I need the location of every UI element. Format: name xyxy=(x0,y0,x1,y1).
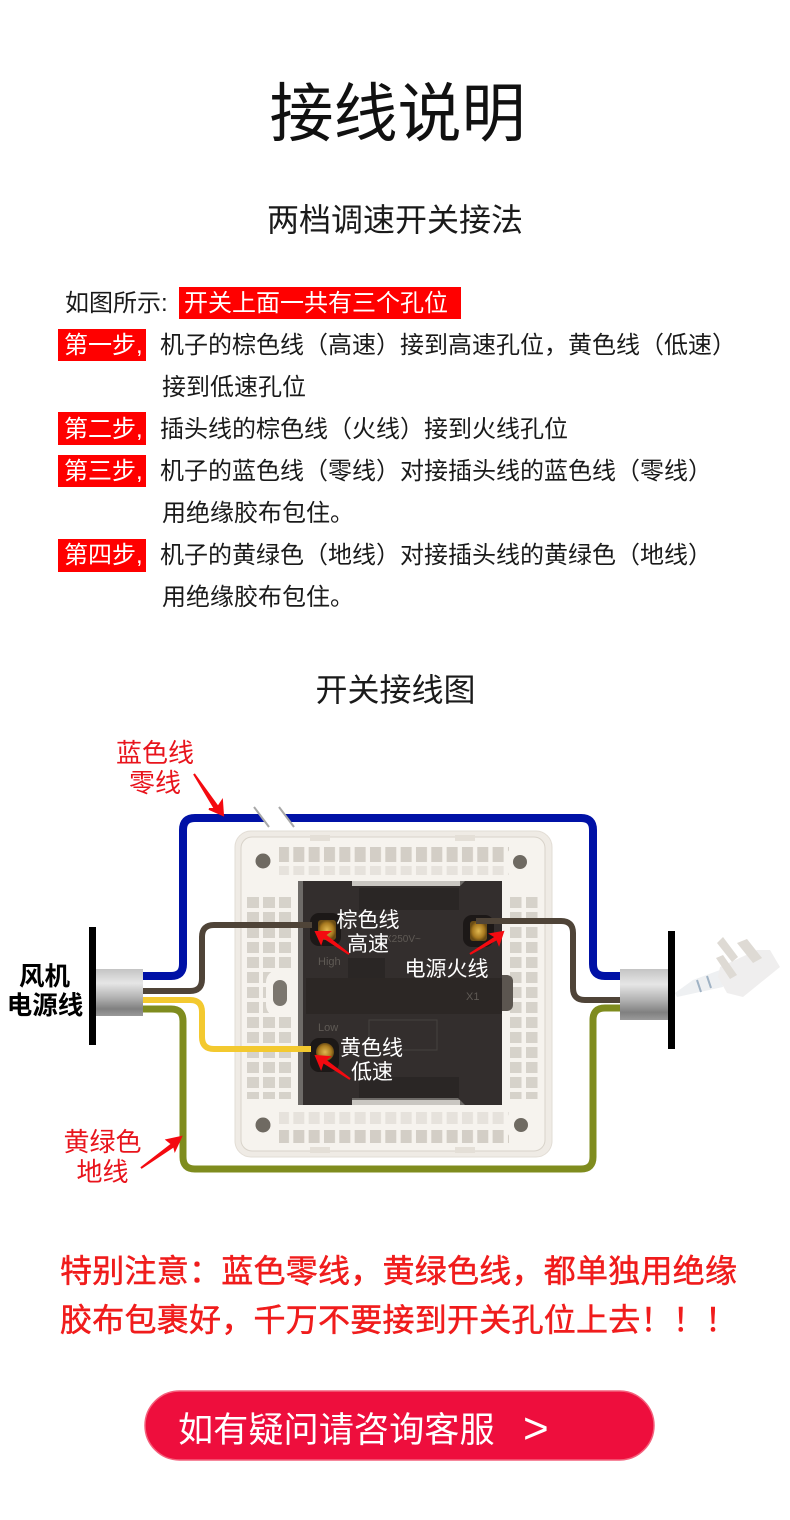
label: power live: 电源火线 xyxy=(404,958,488,981)
step 3: 用绝缘胶布包住。 xyxy=(162,500,354,527)
label: blue neutral: 零线 xyxy=(129,768,181,798)
wire: blue neutral xyxy=(143,818,620,976)
label: yellow-green earth: 地线 xyxy=(76,1157,129,1187)
switch module: High xyxy=(318,956,341,968)
step 4: 第四步, xyxy=(64,542,143,569)
arrow: high speed xyxy=(316,932,349,954)
intro line: 如图所示: xyxy=(65,290,168,317)
arrow: blue neutral xyxy=(194,774,223,815)
switch module xyxy=(298,881,513,1105)
step 4 xyxy=(58,539,712,611)
arrow: yellow-green earth xyxy=(141,1137,181,1168)
wire: cut gap strokes xyxy=(254,807,294,827)
label: brown high speed: 棕色线 xyxy=(336,909,400,932)
wiring diagram xyxy=(7,738,780,1187)
label: fan power cable xyxy=(7,963,83,1020)
instructions text block xyxy=(58,287,736,611)
label: brown high speed: 高速 xyxy=(347,933,389,956)
step 3 xyxy=(58,455,712,527)
label: yellow low speed: 低速 xyxy=(351,1061,393,1084)
right cable connector xyxy=(620,931,675,1049)
switch module: Low xyxy=(318,1022,338,1034)
step 3: 第三步, xyxy=(64,458,143,485)
warning text xyxy=(60,1253,737,1338)
diagram heading: 开关接线图 xyxy=(315,672,476,708)
button: contact support: > xyxy=(523,1404,549,1453)
switch plate xyxy=(235,831,552,1157)
icon: power plug xyxy=(675,937,780,997)
arrow: power live xyxy=(470,932,503,954)
step 1: 接到低速孔位 xyxy=(162,374,306,401)
warning text: 胶布包裹好，千万不要接到开关孔位上去！！！ xyxy=(60,1302,737,1338)
wire: yellow-green earth xyxy=(143,1008,620,1169)
wire: brown high speed xyxy=(143,925,312,991)
step 1 xyxy=(58,329,736,401)
arrow: low speed xyxy=(316,1056,350,1079)
button: contact support xyxy=(145,1391,654,1460)
step 1: 第一步, xyxy=(64,332,143,359)
step 1: 机子的棕色线（高速）接到高速孔位，黄色线（低速） xyxy=(160,332,736,359)
step 4: 用绝缘胶布包住。 xyxy=(162,584,354,611)
terminal: high speed xyxy=(310,913,341,946)
label: yellow-green earth xyxy=(63,1127,142,1187)
intro line xyxy=(65,287,461,319)
label: fan power cable: 风机 xyxy=(19,963,70,991)
label: blue neutral: 蓝色线 xyxy=(116,738,194,768)
switch module: X1 xyxy=(466,991,479,1003)
terminal: low speed xyxy=(310,1038,339,1072)
label: blue neutral xyxy=(116,738,194,798)
step 4: 机子的黄绿色（地线）对接插头线的黄绿色（地线） xyxy=(160,542,712,569)
switch module: X250V~ xyxy=(385,934,421,945)
wire: brown live xyxy=(476,921,620,1000)
title: 接线说明 xyxy=(270,78,526,150)
label: fan power cable: 电源线 xyxy=(7,992,83,1020)
left cable connector xyxy=(89,927,143,1045)
label: yellow low speed: 黄色线 xyxy=(340,1037,403,1060)
step 3: 机子的蓝色线（零线）对接插头线的蓝色线（零线） xyxy=(160,458,712,485)
step 2: 插头线的棕色线（火线）接到火线孔位 xyxy=(160,416,568,443)
wire: yellow low speed xyxy=(143,1000,311,1049)
terminal: power live xyxy=(463,915,494,947)
label: yellow-green earth: 黄绿色 xyxy=(63,1127,142,1157)
button: contact support: 如有疑问请咨询客服 xyxy=(178,1411,495,1450)
label: brown high speed xyxy=(336,909,400,956)
label: yellow low speed xyxy=(340,1037,403,1084)
subtitle: 两档调速开关接法 xyxy=(267,202,523,238)
step 2: 第二步, xyxy=(64,416,143,443)
step 2 xyxy=(58,412,568,445)
intro line: 开关上面一共有三个孔位 xyxy=(184,290,448,317)
warning text: 特别注意：蓝色零线，黄绿色线，都单独用绝缘 xyxy=(60,1253,737,1289)
